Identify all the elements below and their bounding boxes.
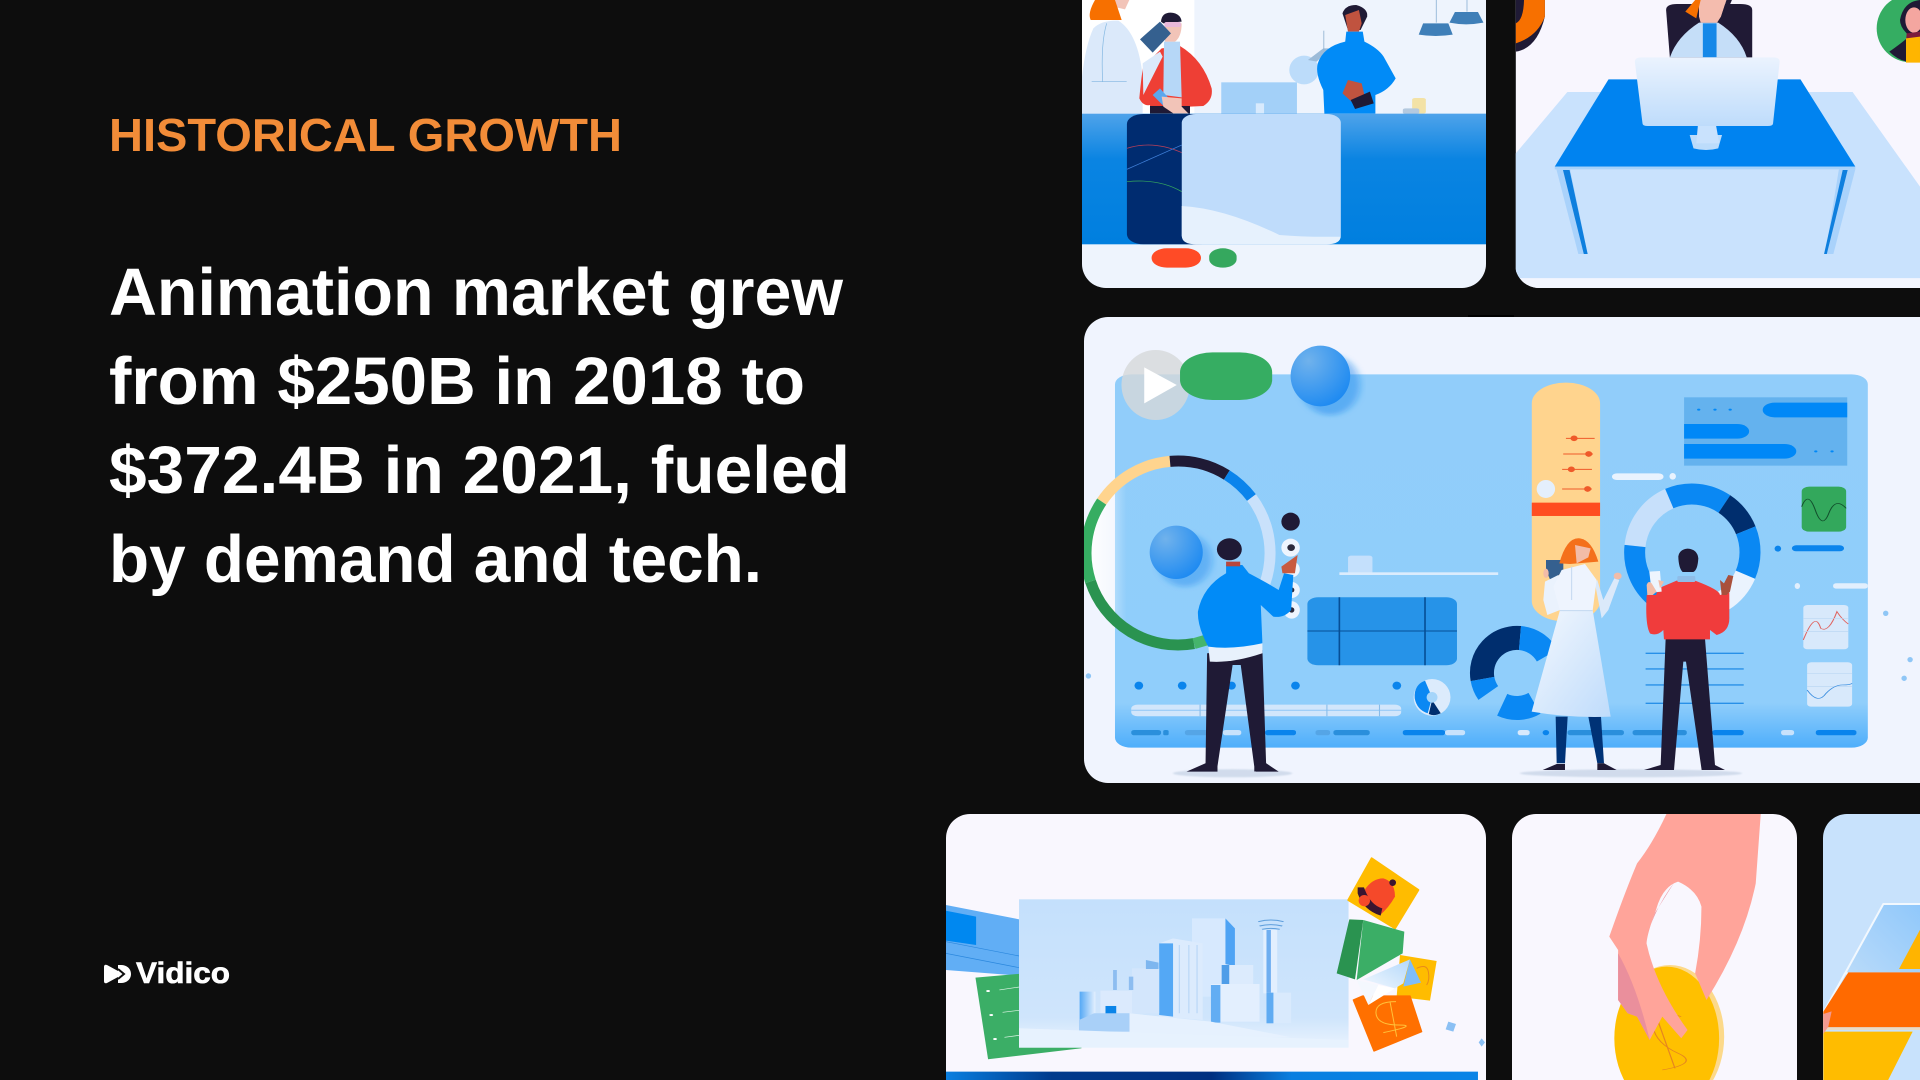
blue counter	[1082, 114, 1488, 244]
lower yellow block	[1823, 1032, 1913, 1080]
horizontal lines	[1646, 653, 1744, 703]
city picture card	[1019, 899, 1349, 1048]
monitor	[1635, 57, 1780, 150]
desk items	[1403, 98, 1426, 114]
hand	[1609, 813, 1761, 1040]
envelope	[1357, 959, 1421, 1005]
blue indicator	[1775, 545, 1844, 552]
data table	[1307, 597, 1457, 665]
avatar: orange hair	[1516, 0, 1545, 52]
bottom status bars	[1131, 730, 1856, 735]
top block	[1824, 904, 1920, 1012]
main statement text	[109, 255, 850, 597]
dark chart screen	[1126, 114, 1201, 244]
panel: reception scene	[1082, 0, 1488, 290]
main statement text: Animation market grew	[109, 255, 844, 330]
ring chart left	[1086, 461, 1270, 645]
divider strip	[1823, 1027, 1920, 1030]
small pie	[1414, 679, 1450, 716]
floor	[1516, 92, 1920, 278]
table top	[1555, 79, 1855, 167]
red pill	[1152, 248, 1201, 268]
panel: desk scene	[1516, 0, 1920, 290]
bars panel	[1684, 397, 1847, 466]
panel: hand with coin	[1512, 813, 1797, 1080]
panel: dashboard scene	[1084, 317, 1920, 783]
wall clock and plant	[1289, 31, 1330, 84]
section heading: HISTORICAL GROWTH	[109, 109, 622, 161]
panel: city scene	[946, 814, 1486, 1080]
green list card	[975, 968, 1082, 1059]
person at desk	[1666, 0, 1752, 58]
main statement text: by demand and tech.	[109, 522, 762, 597]
ground shadows	[1173, 769, 1742, 777]
line cards	[1803, 605, 1852, 707]
stray dots	[1086, 611, 1913, 681]
timeline dots	[1134, 682, 1401, 690]
orange dollar card	[1353, 996, 1422, 1051]
donut chart right	[1635, 494, 1750, 601]
green pill	[1209, 248, 1237, 268]
green pill	[1180, 352, 1272, 400]
timeline track	[1131, 705, 1401, 716]
yellow dollar card	[1397, 955, 1437, 1001]
small accents	[1795, 583, 1868, 589]
inner sphere	[1150, 526, 1212, 587]
ground strip	[1019, 1028, 1349, 1048]
man in red sweater	[1644, 549, 1733, 770]
white label bar	[1612, 473, 1676, 480]
avatar: green circle	[1877, 0, 1920, 63]
blue sphere	[1291, 346, 1360, 415]
table legs	[1556, 169, 1855, 254]
bottom gradient bar	[946, 1072, 1478, 1080]
man in blue turtleneck	[1317, 5, 1396, 114]
bell card	[1348, 858, 1418, 928]
large blue dashboard	[1115, 374, 1868, 748]
green cube	[1337, 919, 1404, 980]
small diamonds	[1446, 1022, 1485, 1047]
woman in lab coat, back view	[1082, 0, 1143, 113]
thermometer scale	[1532, 383, 1600, 622]
shelf	[1339, 556, 1498, 575]
person with blue jacket	[1187, 538, 1298, 772]
main statement text: $372.4B in 2021, fueled	[109, 433, 850, 508]
skin tab	[1823, 1011, 1832, 1034]
donut chart lower	[1482, 638, 1547, 708]
gold coin	[1614, 965, 1724, 1080]
monitor on desk	[1221, 82, 1297, 114]
orange block	[1823, 972, 1920, 1030]
panel: blocks chart	[1823, 814, 1920, 1080]
hanging lamps	[1419, 0, 1483, 36]
light screen panel	[1182, 114, 1341, 244]
small dark notch	[1468, 315, 1514, 318]
blue card back	[946, 905, 1031, 977]
control knobs	[1281, 513, 1300, 619]
yellow accent	[1899, 927, 1920, 969]
green wave card	[1802, 487, 1846, 532]
woman in white coat	[1532, 538, 1622, 770]
play button	[1121, 350, 1190, 420]
logo: Vidico: Vidico	[136, 957, 230, 990]
main statement text: from $250B in 2018 to	[109, 344, 805, 419]
person in red jacket holding a tablet	[1139, 13, 1212, 114]
skyline	[1079, 918, 1291, 1037]
